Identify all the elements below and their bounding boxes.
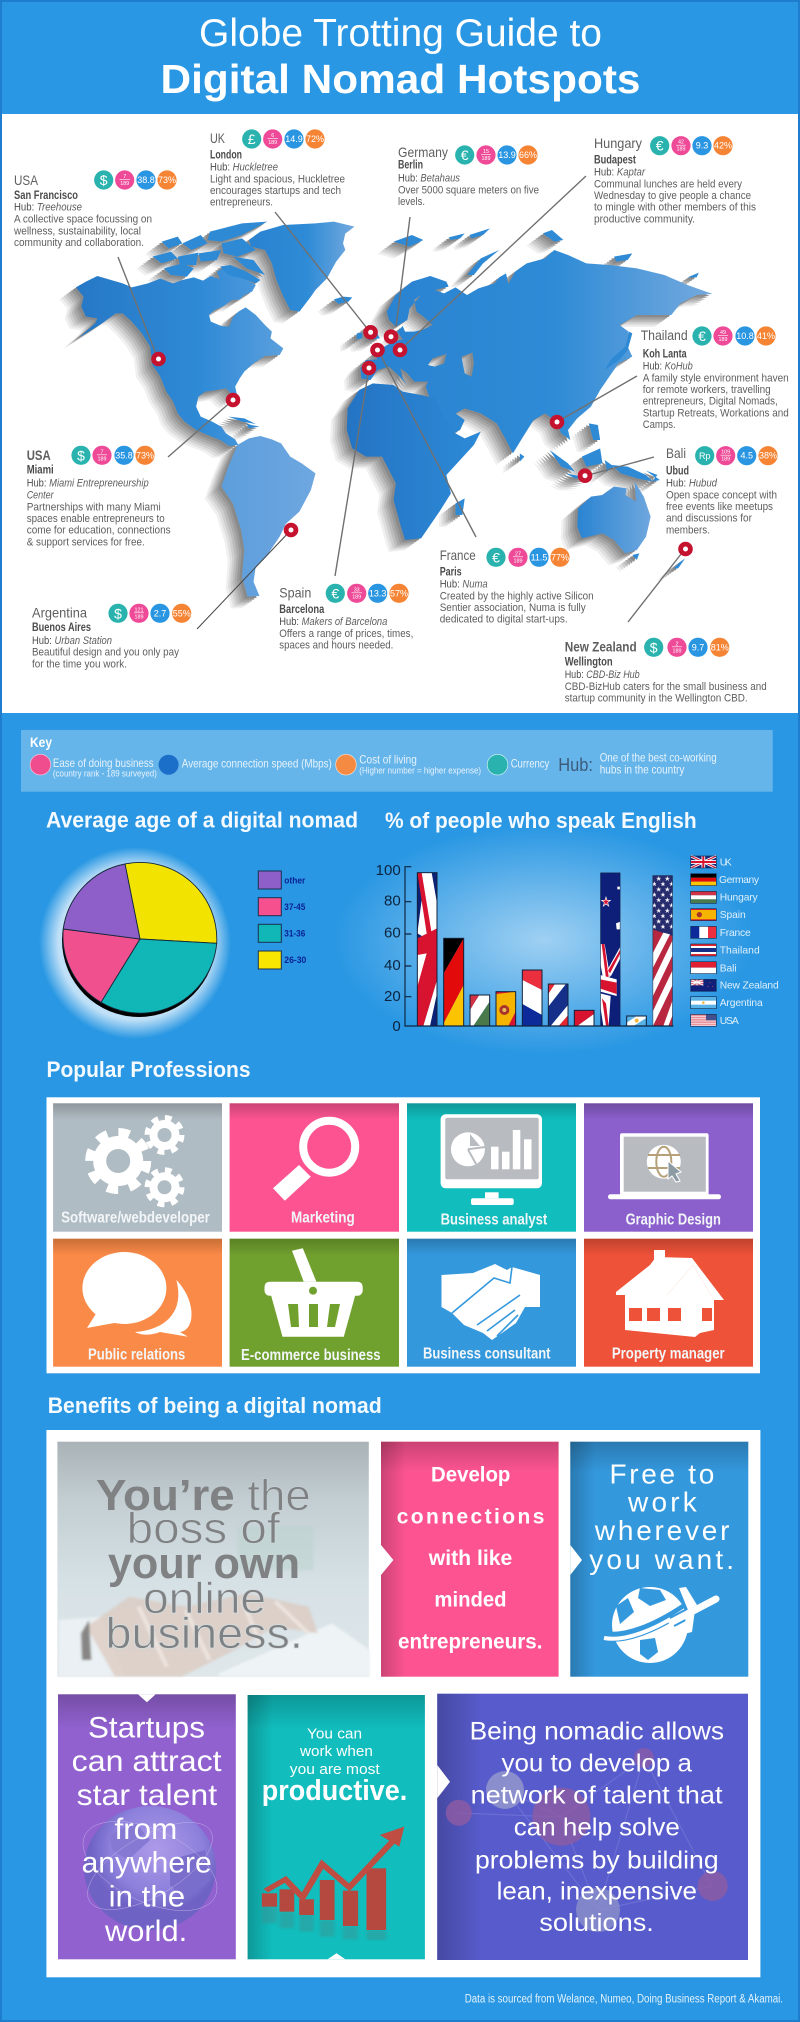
callout: Thailand Koh Lanta: 189 (718, 337, 728, 343)
callout: USA San Francisco: USA (14, 172, 39, 188)
callout: New Zealand Wellington: 2 (676, 641, 678, 647)
callout: Bali Ubud: Ubud (666, 466, 689, 478)
callout: Thailand Koh Lanta: entrepreneurs, Digital Nomads, (643, 396, 778, 408)
panel: key: hubs in the country (600, 762, 684, 776)
callout: Hungary Budapest: € (656, 138, 664, 154)
callout: Spain Barcelona (279, 584, 413, 652)
title: Digital Nomad Hotspots (160, 56, 640, 102)
bar chart: percent who speak English: 0 (392, 1018, 401, 1035)
callout: Argentina Buenos Aires: Buenos Aires (32, 622, 91, 634)
tile: startups attract talent: in the (109, 1881, 185, 1914)
tile: being nomadic: problems by building (475, 1846, 719, 1874)
callout: Germany Berlin: 15 (483, 149, 489, 155)
title: Globe Trotting Guide to (199, 12, 602, 55)
panel: key: Hub: (558, 755, 593, 775)
tile: productive: productive. (262, 1775, 407, 1807)
callout: Thailand Koh Lanta: Camps. (643, 419, 676, 431)
tile: you're the boss (57, 1442, 370, 1677)
flag legend (691, 856, 779, 1027)
callout: Germany Berlin: 13.9 (498, 150, 516, 160)
pie legend: other (284, 875, 306, 886)
callout: New Zealand Wellington: $ (650, 639, 658, 655)
flag: France (691, 926, 716, 938)
location pins (151, 325, 693, 556)
tile: you're the boss: You’re the (96, 1471, 311, 1520)
callout: Germany Berlin (398, 144, 539, 208)
flag legend: Argentina (720, 998, 763, 1009)
tile: productive: you are most (290, 1761, 381, 1778)
callout: Thailand Koh Lanta: for remote workers, travelling (643, 384, 771, 396)
callout: UK London: entrepreneurs. (210, 197, 273, 209)
tile: develop connections: connections (397, 1505, 544, 1528)
tile: you're the boss: online (143, 1574, 266, 1623)
callout: France Paris: dedicated to digital start-ups. (440, 614, 568, 626)
bar: Hungary (470, 995, 490, 1026)
panel: key: One of the best co-working (600, 751, 717, 765)
callout: Thailand Koh Lanta: 41% (757, 331, 775, 341)
tile: free to work: work (627, 1487, 698, 1518)
heading: percent English: % of people who speak English (385, 808, 697, 833)
bar: Thailand (548, 984, 568, 1026)
callout: France Paris: Sentier association, Numa is fully (440, 602, 586, 614)
callout: France Paris: 11.5 (531, 552, 547, 562)
panel: key: Average connection speed (Mbps) (182, 757, 332, 771)
tile: business consultant (407, 1239, 576, 1367)
tile: free to work: wherever (594, 1515, 729, 1546)
callout: France Paris: 27 (515, 551, 521, 557)
callout: New Zealand Wellington: Hub: CBD-Biz Hub (565, 669, 640, 681)
callout: France Paris: Created by the highly active Silicon (440, 590, 594, 602)
image: globe (70, 1803, 230, 1930)
callout: USA Miami: USA (27, 447, 51, 463)
callout: USA San Francisco: wellness, sustainability, local (13, 226, 141, 238)
bar: UK (417, 873, 437, 1026)
icon: magnifying glass (273, 1121, 355, 1201)
callout: USA San Francisco: 73% (158, 175, 176, 185)
tile: productive: work when (299, 1743, 373, 1760)
bar: New Zealand (600, 873, 620, 1026)
flag: Bali (691, 962, 716, 974)
tile: startups attract talent: world. (104, 1915, 187, 1948)
callout: USA Miami: Center (27, 489, 55, 501)
icon: handshake (442, 1264, 540, 1340)
callout: UK London: 189 (268, 140, 277, 146)
callout: UK London: encourages startups and tech (210, 185, 341, 197)
callout: Thailand Koh Lanta: € (698, 328, 706, 344)
tile: e-commerce business (230, 1239, 399, 1367)
panel: key (21, 730, 773, 792)
tile: being nomadic: solutions. (539, 1909, 654, 1937)
flag legend: Spain (720, 910, 746, 921)
callout: Thailand Koh Lanta: Koh Lanta (643, 349, 687, 361)
panel: key: Cost of living (359, 753, 417, 767)
callout: Spain Barcelona: Barcelona (279, 604, 325, 616)
flag: Germany (691, 874, 716, 886)
chart axes (405, 867, 673, 1026)
bar: Germany (444, 938, 464, 1026)
callout: UK London (210, 129, 345, 209)
callout: USA Miami: & support services for free. (27, 536, 145, 548)
callout: Bali Ubud: Open space concept with (666, 489, 777, 501)
callout: UK London: Light and spacious, Huckletree (210, 173, 345, 185)
callout: Thailand Koh Lanta: Hub: KoHub (643, 360, 693, 372)
icon: house (616, 1250, 724, 1337)
tile: startups attract talent: anywhere (82, 1847, 212, 1880)
callout: New Zealand Wellington: New Zealand (565, 639, 637, 655)
tile: property manager (584, 1239, 753, 1367)
tile: productive (248, 1695, 425, 1959)
callout: USA Miami: spaces enable entrepreneurs to (27, 513, 165, 525)
flag: Spain (691, 909, 716, 921)
callout: Bali Ubud: Hub: Hubud (666, 477, 718, 489)
flag legend: USA (720, 1016, 739, 1027)
callout: USA Miami: come for education, connections (27, 525, 171, 537)
callout: Hungary Budapest: productive community. (594, 213, 695, 225)
tile: startups attract talent: star talent (77, 1779, 218, 1812)
tile: you're the boss: boss of (127, 1504, 281, 1553)
callout: Argentina Buenos Aires: Argentina (32, 605, 87, 621)
tile: free to work: Free to (610, 1458, 714, 1489)
tile: being nomadic: can help solve (514, 1813, 680, 1841)
flag legend: Bali (720, 963, 737, 974)
callout: UK London: £ (248, 131, 256, 147)
tile: develop connections: entrepreneurs. (398, 1631, 542, 1654)
heading: average age: Average age of a digital nomad (46, 807, 358, 832)
panel: world map (2, 114, 798, 713)
callout: Bali Ubud: Bali (666, 445, 686, 461)
panel: key: Key (30, 735, 52, 750)
callout: New Zealand Wellington: Wellington (565, 657, 613, 669)
tile: public relations: Public relations (88, 1346, 185, 1363)
tile: graphic design: Graphic Design (626, 1211, 721, 1228)
tile: business consultant: Business consultant (423, 1345, 550, 1362)
callout: Spain Barcelona: Offers a range of prices, times, (279, 628, 413, 640)
icon: monitor with charts (441, 1114, 542, 1205)
tile: startups attract talent (58, 1694, 236, 1959)
tile: software developer (53, 1103, 222, 1232)
callout: Argentina Buenos Aires: for the time you work. (32, 658, 127, 670)
callout: USA San Francisco (13, 170, 177, 249)
tile: startups attract talent: from (114, 1813, 177, 1846)
callout: Bali Ubud: 4.5 (740, 451, 753, 461)
tile: being nomadic: Being nomadic allows (470, 1717, 724, 1745)
callout: Hungary Budapest: to mingle with other members of this (594, 202, 756, 214)
callout: France Paris: Paris (440, 567, 462, 579)
callout: USA San Francisco: $ (100, 172, 108, 188)
callout: Germany Berlin: Berlin (398, 159, 423, 171)
callout: USA San Francisco: 7 (123, 174, 126, 180)
flag: UK (691, 856, 716, 868)
callout: France Paris: Hub: Numa (440, 579, 488, 591)
panel: key: Currency (511, 757, 549, 771)
callout: Hungary Budapest: Communal lunches are held every (594, 178, 742, 190)
icon: shopping basket (264, 1248, 363, 1337)
tile: startups attract talent: can attract (72, 1745, 222, 1778)
callout: USA San Francisco: A collective space focussing on (14, 214, 152, 226)
callout: Spain Barcelona: 189 (352, 594, 361, 600)
tile: develop connections: with like (428, 1547, 512, 1570)
callout: Spain Barcelona: € (331, 585, 339, 601)
callout: UK London: London (210, 150, 242, 162)
callout: USA San Francisco: 38.8 (137, 175, 155, 185)
callout: USA Miami: 73% (136, 450, 154, 460)
callout: USA Miami: Hub: Miami Entrepreneurship (27, 478, 149, 490)
callout: New Zealand Wellington: CBD-BizHub caters for the small business and (565, 681, 767, 693)
callout: New Zealand Wellington: startup community in the Wellington CBD. (565, 693, 748, 705)
callout: Bali Ubud: 38% (759, 451, 777, 461)
tile: you're the boss: your own (108, 1539, 300, 1588)
callout: Bali Ubud: members. (666, 524, 710, 536)
icon: globe with plane (604, 1587, 716, 1663)
bar: USA (653, 875, 673, 1027)
flag legend: New Zealand (720, 980, 779, 991)
tile: develop connections: minded (434, 1589, 507, 1612)
callout: Bali Ubud: 109 (721, 450, 730, 456)
bar chart: percent who speak English: 100 (376, 862, 401, 879)
flag: Argentina (691, 997, 716, 1009)
pie legend: 37-45 (284, 902, 306, 913)
callout: Spain Barcelona: 33 (354, 587, 360, 593)
pie legend: 26-30 (284, 955, 306, 966)
callout: UK London: UK (210, 130, 226, 146)
callout: Thailand Koh Lanta (641, 326, 789, 431)
flag: Hungary (691, 891, 716, 903)
callout: Germany Berlin: Over 5000 square meters on five (398, 185, 539, 197)
callout: Germany Berlin: 66% (519, 150, 537, 160)
bar: Bali (574, 1010, 594, 1026)
callout: Spain Barcelona: 13.3 (369, 588, 386, 598)
callout: USA San Francisco: San Francisco (14, 190, 78, 202)
callout: Germany Berlin: Hub: Betahaus (398, 173, 460, 185)
flag legend: Hungary (720, 893, 759, 904)
tile: develop connections (381, 1442, 559, 1677)
callout: France Paris (440, 547, 594, 626)
callout: USA Miami: Miami (27, 464, 54, 476)
callout: USA Miami: 35.8 (115, 450, 133, 460)
tile: marketing (230, 1103, 399, 1232)
callout: Hungary Budapest: 9.3 (696, 141, 708, 151)
tile: productive: You can (307, 1725, 362, 1742)
callout: Hungary Budapest: Hungary (594, 135, 642, 151)
pie legend (258, 871, 306, 969)
flag legend: Germany (719, 875, 760, 886)
callout: UK London: 72% (306, 134, 324, 144)
callout: Argentina Buenos Aires: $ (114, 605, 122, 621)
callout: France Paris: 189 (514, 558, 522, 564)
callout: Argentina Buenos Aires: Beautiful design and you only pay (32, 647, 179, 659)
callout: Hungary Budapest: Budapest (594, 154, 636, 166)
tile: being nomadic (437, 1694, 748, 1960)
callout: Germany Berlin: € (461, 147, 469, 163)
callout: Bali Ubud (666, 445, 778, 536)
callout: USA Miami: Partnerships with many Miami (27, 501, 161, 513)
callout: Hungary Budapest: Wednesday to give people a chance (594, 190, 751, 202)
callout: Hungary Budapest (594, 135, 756, 225)
title (160, 12, 640, 102)
callout: Bali Ubud: free events like meetups (666, 501, 773, 513)
panel: benefits (46, 1430, 760, 1977)
tile: business analyst: Business analyst (441, 1211, 547, 1228)
tile: you're the boss: business. (106, 1609, 303, 1658)
callout: Thailand Koh Lanta: Thailand (641, 327, 688, 343)
flag: New Zealand (691, 979, 716, 991)
callout: USA San Francisco: community and collaboration. (14, 237, 144, 249)
tile: startups attract talent: Startups (88, 1711, 205, 1744)
tile: business analyst (407, 1103, 576, 1232)
chart: rising bars with arrow (262, 1827, 404, 1940)
callout: Argentina Buenos Aires: 55% (173, 608, 191, 618)
callout: Thailand Koh Lanta: 10.8 (736, 331, 754, 341)
flag: USA (691, 1014, 716, 1026)
callout: Spain Barcelona: 57% (390, 588, 408, 598)
bar chart: percent who speak English: 20 (384, 988, 401, 1005)
callout: Hungary Budapest: 42 (678, 140, 684, 146)
panel: key: Ease of doing business (53, 756, 154, 770)
callout: Germany Berlin: levels. (398, 196, 425, 208)
tile: software developer: Software/webdeveloper (61, 1210, 210, 1227)
tile: free to work (570, 1442, 748, 1677)
tile: being nomadic: lean, inexpensive (497, 1877, 697, 1905)
callout: New Zealand Wellington: 189 (672, 648, 682, 654)
callout: Bali Ubud: and discussions for (666, 513, 752, 525)
callout: France Paris: € (492, 549, 500, 565)
tile: e-commerce business: E-commerce business (241, 1347, 381, 1364)
pie legend: 31-36 (284, 929, 305, 940)
tile: graphic design (584, 1103, 753, 1232)
callout: USA Miami (27, 446, 171, 548)
callout: New Zealand Wellington (565, 638, 767, 705)
callout: Spain Barcelona: Spain (279, 584, 311, 600)
icon: laptop with globe (608, 1133, 721, 1199)
callout: France Paris: France (440, 547, 476, 563)
callout: Argentina Buenos Aires: 121 (134, 607, 144, 613)
icon: gears (91, 1118, 181, 1204)
callout: Germany Berlin: 189 (482, 156, 490, 162)
tile: marketing: Marketing (291, 1210, 355, 1227)
tile: property manager: Property manager (612, 1345, 725, 1362)
flag legend: UK (720, 858, 732, 869)
panel: key: (country rank - 189 surveyed) (53, 769, 157, 780)
callout: Argentina Buenos Aires: Hub: Urban Station (32, 635, 112, 647)
flag legend: France (720, 928, 751, 939)
callout: USA Miami: $ (77, 447, 85, 463)
bar chart: percent who speak English: 40 (384, 957, 401, 974)
callout: Bali Ubud: Rp (699, 451, 710, 461)
callout: New Zealand Wellington: 9.7 (692, 642, 704, 652)
callout: USA San Francisco: Hub: Treehouse (14, 202, 82, 214)
callout: France Paris: 77% (551, 552, 569, 562)
callout: Argentina Buenos Aires (32, 604, 191, 670)
tile: public relations (53, 1239, 222, 1367)
icon: speech bubbles (82, 1252, 192, 1337)
bar chart: percent who speak English: 80 (384, 893, 401, 910)
callout: Spain Barcelona: Hub: Makers of Barcelona (279, 616, 387, 628)
leader lines (118, 176, 685, 629)
callout: USA Miami: 7 (100, 449, 104, 455)
tile: being nomadic: network of talent that (471, 1781, 723, 1809)
bar chart: percent who speak English: 60 (384, 925, 401, 942)
callout: Argentina Buenos Aires: 189 (134, 614, 144, 620)
bar chart: percent who speak English (348, 834, 738, 1046)
callout: Hungary Budapest: 42% (714, 141, 732, 151)
flag: Thailand (691, 944, 716, 956)
callout: Argentina Buenos Aires: 2.7 (154, 608, 166, 618)
callout: USA Miami: 189 (98, 456, 106, 462)
panel: key: (Higher number = higher expense) (359, 765, 481, 776)
callout: Bali Ubud: 189 (721, 457, 730, 463)
callout: Germany Berlin: Germany (398, 144, 448, 160)
callout: New Zealand Wellington: 81% (711, 642, 729, 652)
callout: Thailand Koh Lanta: 49 (720, 330, 726, 336)
heading: popular professions: Popular Professions (46, 1057, 250, 1082)
callout: Hungary Budapest: 189 (676, 147, 686, 153)
callout: UK London: 6 (271, 133, 274, 139)
tile: free to work: you want. (589, 1544, 734, 1575)
callout: USA San Francisco: 189 (120, 181, 129, 187)
photo: hands on keyboard (58, 1527, 370, 1677)
bar: Spain (496, 992, 516, 1026)
image: talent network (446, 1748, 728, 1932)
tile: being nomadic: you to develop a (502, 1750, 692, 1778)
bar: France (522, 970, 542, 1026)
callout: Spain Barcelona: spaces and hours needed. (279, 640, 393, 652)
callout: UK London: 14.9 (285, 134, 303, 144)
pie chart: average age (39, 847, 231, 1039)
callout: Hungary Budapest: Hub: Kaptar (594, 166, 646, 178)
heading: benefits: Benefits of being a digital nomad (48, 1393, 382, 1418)
callout: UK London: Hub: Huckletree (210, 161, 278, 173)
panel: popular professions (46, 1097, 760, 1373)
flag legend: Thailand (720, 946, 760, 957)
world map with drop shadow (59, 222, 713, 609)
bar: Argentina (627, 1016, 646, 1026)
tile: develop connections: Develop (431, 1464, 510, 1487)
